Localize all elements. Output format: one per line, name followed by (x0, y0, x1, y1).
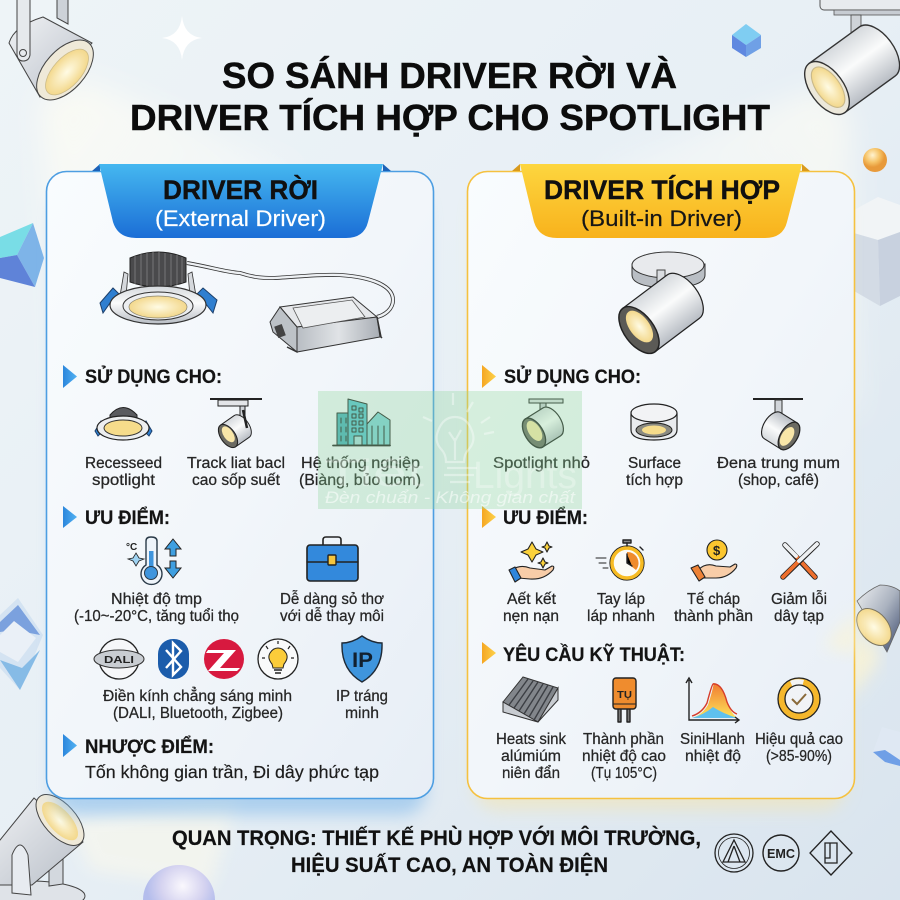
labels: use cases: (shop, cafê) (738, 472, 819, 489)
icon: buildings (333, 399, 390, 446)
section heading: yêu cầu kỹ thuật: YÊU CẦU KỸ THUẬT: (503, 644, 685, 666)
header ribbon: DRIVER RỜI (163, 174, 318, 205)
section heading: sử dụng cho: SỬ DỤNG CHO: (504, 366, 641, 388)
header ribbon (92, 164, 391, 238)
section heading: ưu điểm: ƯU ĐIỂM: (85, 507, 170, 529)
header ribbon (512, 164, 810, 238)
labels: control and IP: minh (345, 705, 379, 722)
icon: EMC emblem: EMC (767, 847, 795, 861)
watermark tagline: Đèn chuẩn - Không gian chất (325, 489, 577, 507)
footer text: QUAN TRỌNG: THIẾT KẾ PHÙ HỢP VỚI MÔI TRƯỜNG, (172, 826, 701, 850)
icon: capacitor: TỤ (617, 690, 632, 701)
footer text: HIỆU SUẤT CAO, AN TOÀN ĐIỆN (291, 853, 608, 877)
illustration: integrated spotlight (611, 252, 711, 360)
title: DRIVER TÍCH HỢP CHO SPOTLIGHT (130, 97, 770, 138)
watermark bulb (423, 393, 494, 482)
icon: stopwatch (596, 540, 644, 580)
labels: requirements (496, 731, 843, 782)
labels: use cases: Recesseed (85, 455, 162, 472)
icon: toolbox (307, 537, 358, 581)
labels: requirements: nhiệt độ cao (582, 748, 666, 765)
labels: benefits: Tay láp (597, 591, 645, 608)
labels: requirements: alúmiúm (501, 748, 561, 765)
panel: driver tích hợp (468, 164, 854, 798)
labels: requirements: SiniHlanh (680, 731, 745, 748)
labels: use cases: cao sốp suết (192, 472, 281, 489)
labels: use cases (493, 455, 840, 489)
title: SO SÁNH DRIVER RỜI VÀ (222, 54, 677, 96)
labels: use cases: Track liat bacl (187, 455, 285, 472)
icon: certification emblem triangle (715, 834, 753, 872)
icon: thermometer: °C (126, 542, 137, 553)
icon: crossed tools (783, 544, 817, 577)
labels: requirements: Thành phần (583, 731, 664, 748)
icon: IP shield (342, 636, 382, 682)
labels: use cases: Spotlight nhỏ (493, 455, 590, 472)
labels: benefits: thành phần (674, 608, 753, 625)
labels: requirements: Hiệu quả cao (755, 731, 843, 748)
labels: control and IP: IP tráng (336, 688, 388, 705)
labels: thermal and service: (-10~-20°C, tăng tuổi thọ (74, 608, 239, 625)
decoration: right lamp beam over panel (823, 610, 858, 655)
icon: thermal curve chart (686, 678, 739, 723)
decoration: white cube (826, 197, 900, 306)
watermark brand (324, 453, 577, 497)
labels: benefits: dây tạp (774, 608, 824, 625)
labels: benefits: Giảm lỗi (771, 591, 827, 608)
labels: thermal and service: với dễ thay môi (280, 608, 384, 625)
header ribbon: DRIVER TÍCH HỢP (544, 174, 780, 205)
decoration: lamp right (850, 585, 900, 652)
footer text (172, 826, 701, 877)
labels: thermal and service: Nhiệt độ tmp (111, 591, 202, 608)
decoration: lamp top left (9, 0, 104, 110)
icon: small spotlight (518, 399, 568, 452)
icon: DALI: DALI (104, 655, 134, 666)
icon: thermometer (126, 537, 181, 584)
section heading: sử dụng cho: SỬ DỤNG CHO: (85, 366, 222, 388)
labels: use cases: Hệ thống nghiệp (301, 455, 420, 472)
panel card (468, 172, 854, 798)
labels: requirements: niên đẩn (502, 765, 560, 782)
icon: diamond emblem (810, 831, 852, 875)
labels: control and IP: (DALI, Bluetooth, Zigbee) (113, 705, 283, 722)
icon: Bluetooth (158, 639, 189, 679)
labels: use cases: Surface (628, 455, 681, 472)
decoration: orange ball (863, 148, 887, 172)
icon: track light (210, 399, 262, 451)
icon: capacitor (613, 678, 636, 722)
icon: heat sink (503, 677, 558, 722)
icon: hand with coin (691, 540, 737, 581)
icon: DALI (94, 639, 144, 679)
decoration: lamp top right (796, 0, 900, 122)
icon: efficiency ring (778, 678, 820, 720)
header ribbon: (Built-in Driver) (581, 206, 742, 231)
labels: requirements: Heats sink (496, 731, 566, 748)
labels: use cases (85, 455, 421, 489)
panel card (46, 172, 434, 798)
labels: requirements: nhiệt độ (685, 748, 741, 765)
labels: benefits: nẹn nạn (503, 608, 559, 625)
labels: benefits (503, 591, 827, 625)
labels: benefits: Tế cháp (687, 591, 740, 608)
icon: smart bulb (258, 639, 298, 679)
labels: requirements: (Tụ 105°C) (591, 765, 657, 782)
title (130, 54, 770, 138)
section heading: nhược điểm: NHƯỢC ĐIỂM: (85, 736, 214, 758)
panel: driver rời (46, 164, 434, 798)
labels: requirements: (>85-90%) (766, 748, 832, 765)
watermark brand: Tiết (324, 453, 425, 495)
watermark (318, 391, 582, 509)
watermark brand: Lights (473, 455, 577, 497)
decoration: pearl ball (143, 865, 215, 900)
illustration: recessed lamp with external driver (100, 252, 393, 352)
labels: thermal and service: Dễ dàng sỏ thơ (280, 591, 384, 608)
section heading: ưu điểm: ƯU ĐIỂM: (503, 507, 588, 529)
labels: benefits: láp nhanh (587, 608, 655, 625)
labels: control and IP: Điền kính chẳng sáng minh (103, 687, 292, 705)
labels: thermal and service (74, 591, 384, 625)
header ribbon: (External Driver) (155, 206, 326, 231)
icon: surface lamp (631, 404, 677, 440)
icon: EMC emblem (763, 835, 799, 871)
decoration: sparkle (162, 16, 202, 60)
decoration: lamp bottom left (0, 786, 93, 900)
labels: use cases: tích hợp (626, 472, 683, 489)
labels: use cases: spotlight (92, 472, 156, 489)
icon: Zigbee (204, 639, 244, 679)
icon: track pendant lamp (753, 399, 804, 454)
labels: benefits: Aết kết (507, 591, 557, 608)
text: nhược điểm detail: Tốn không gian trần, Đi dây phức tạp (85, 762, 379, 782)
decoration: blue cube (732, 24, 761, 57)
icon: hand with sparkles (509, 542, 554, 582)
icon: recessed spotlight (95, 408, 152, 440)
icon: IP shield: IP (352, 649, 373, 672)
decoration: glass square left (0, 598, 43, 690)
labels: use cases: (Biàng, bủo uom) (299, 472, 421, 489)
labels: control and IP (103, 687, 388, 722)
decoration: hexagon right (873, 727, 900, 766)
panel glows (54, 190, 846, 815)
labels: use cases: Đena trung mum (717, 455, 840, 472)
icon: hand with coin: $ (713, 543, 721, 558)
decoration: blue gem left (0, 223, 44, 287)
